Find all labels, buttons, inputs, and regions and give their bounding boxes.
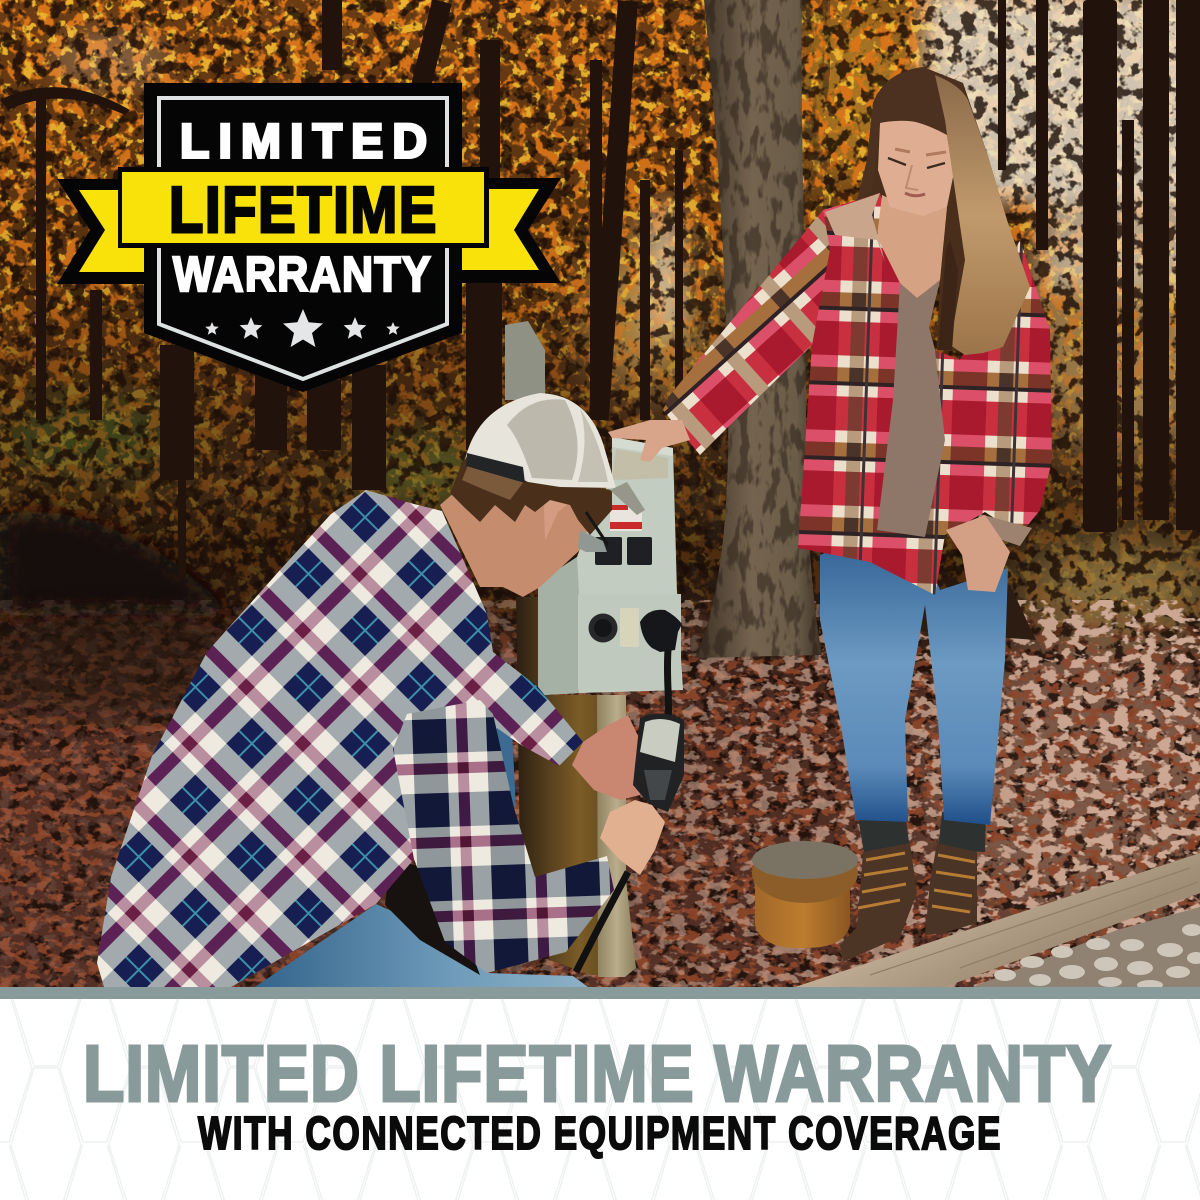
warranty band [0,987,1200,999]
man's jeans [255,904,588,987]
receptacle [620,608,639,647]
round power outlet [588,614,618,642]
woman's boots [840,843,977,962]
man's hair [450,437,612,535]
surge protector device [633,713,684,812]
footer panel with hexagon pattern [0,999,1200,1200]
woman's face [878,121,955,216]
woman in red plaid shirt [608,67,1052,962]
woman's hair front [857,67,1030,355]
woman's socks [857,812,986,858]
large tree trunk [695,0,822,658]
wooden support post [516,597,600,975]
plaid shirt body [795,193,1052,595]
plaid shirt sleeve [663,210,830,455]
grey conduit pipe [597,695,636,977]
woman's hand on hip [946,515,1010,592]
trucker cap [465,393,645,515]
shield [144,83,462,392]
woman's jeans [820,532,1008,825]
breakers [595,537,652,565]
man's sleeve [393,700,614,973]
limited text: LIMITED [180,116,427,168]
black cord to ground [576,872,628,972]
glasses [578,512,608,552]
orange pipe with metal lid [752,841,858,948]
ribbon tails [57,178,561,284]
shirt cuff by hip [972,514,1032,546]
dark gap under arm [385,860,480,975]
background tree trunks [0,0,1200,580]
shield inner outline [159,98,447,379]
wooden plank [795,853,1200,987]
electrical pedestal box [538,437,683,695]
dark hollow at left [0,512,240,615]
ribbon center [118,167,489,248]
dark tree root shadow [920,585,1036,640]
sky gaps through the canopy [50,0,1200,340]
forest floor leaves [0,595,1200,987]
gravel [973,907,1200,990]
autumn foliage texture [0,0,1200,640]
device cable [667,650,669,722]
woman's neck and chest [877,195,947,298]
woman's hair back [857,67,1030,353]
man's upper hand [572,715,640,800]
man's neck and face [440,494,587,597]
man in blue plaid shirt [97,393,645,987]
broken wooden post [505,321,545,400]
collar [825,193,885,262]
man's ear [544,500,568,540]
plug connected to outlet [640,610,682,652]
woman's hand on box [608,420,690,462]
taupe top [877,280,945,537]
man's plaid shirt [97,490,583,987]
rating stars [205,309,400,347]
warning label [610,505,642,531]
warranty text: WARRANTY [173,248,432,302]
warranty badge [57,83,561,392]
man's lower hand [600,800,665,875]
lifetime text: LIFETIME [169,173,438,246]
